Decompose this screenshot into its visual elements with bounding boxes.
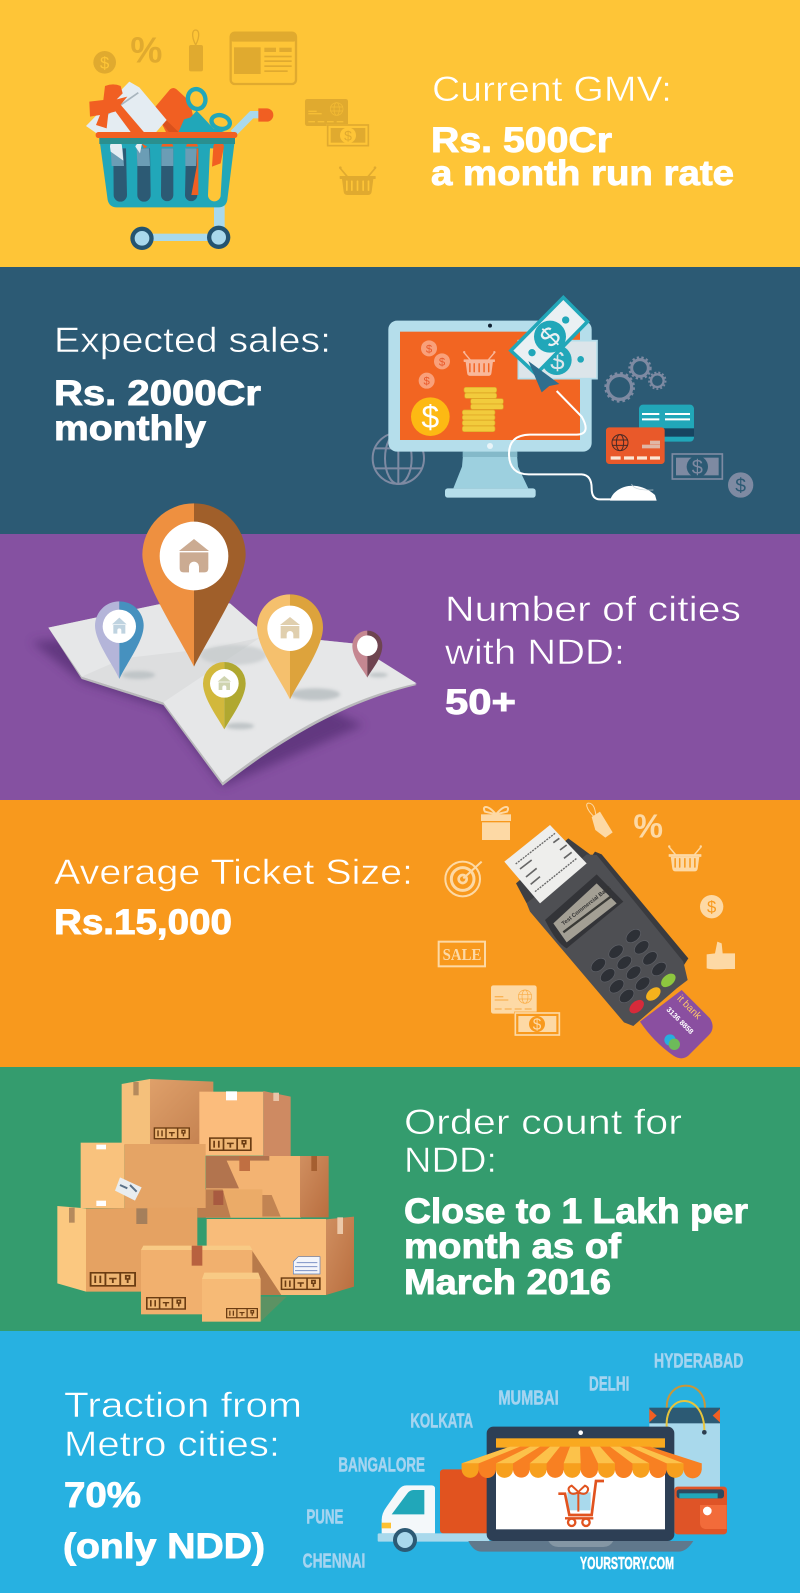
shopping bag bbox=[649, 1386, 720, 1490]
text: metro traction bbox=[63, 1386, 302, 1566]
text: expected sales bbox=[54, 321, 331, 448]
text: expected sales: monthly bbox=[54, 409, 207, 448]
pin: olive bbox=[203, 662, 246, 729]
truck bbox=[378, 1469, 490, 1552]
text: current GMV bbox=[431, 70, 734, 193]
text: average ticket size: Rs.15,000 bbox=[54, 903, 232, 942]
box: back top right bbox=[199, 1091, 291, 1156]
panel: current GMV bbox=[0, 0, 800, 267]
awning bbox=[462, 1447, 702, 1478]
coins on screen: $ bbox=[421, 399, 439, 435]
text: order count bbox=[404, 1103, 748, 1302]
cart frame and wheels bbox=[130, 108, 273, 250]
coins on screen: $ bbox=[426, 343, 433, 355]
box: front middle bbox=[141, 1246, 252, 1314]
keypad bbox=[589, 927, 669, 1005]
illustration: stacked boxes bbox=[57, 1079, 354, 1322]
box: middle left bbox=[81, 1143, 206, 1208]
text: metro traction: 70% bbox=[64, 1476, 141, 1515]
box: bottom right bbox=[207, 1217, 354, 1295]
card: it bank bbox=[675, 993, 703, 1022]
illustration: map with pins bbox=[32, 503, 417, 787]
monitor bbox=[388, 321, 592, 498]
illustration: card terminal bbox=[439, 803, 735, 1058]
city labels: HYDERABAD bbox=[654, 1350, 743, 1373]
text: order count: month as of bbox=[404, 1227, 621, 1266]
text: metro traction: (only NDD) bbox=[63, 1527, 265, 1566]
text: current GMV: Current GMV: bbox=[432, 70, 672, 109]
text: expected sales: Expected sales: bbox=[54, 321, 331, 360]
background icons: SALE bbox=[443, 945, 481, 964]
text: order count: Close to 1 Lakh per bbox=[404, 1192, 748, 1231]
text: current GMV: a month run rate bbox=[431, 154, 734, 193]
panel: metro traction bbox=[0, 1331, 800, 1593]
background icons: % bbox=[633, 809, 663, 846]
text: metro traction: Metro cities: bbox=[64, 1425, 280, 1464]
pin shadows bbox=[122, 645, 388, 729]
panel: expected sales bbox=[0, 267, 800, 535]
text: metro traction: Traction from bbox=[64, 1386, 302, 1425]
text: order count: March 2016 bbox=[404, 1263, 611, 1302]
pin: blue bbox=[95, 601, 144, 679]
illustration: shopping cart: $ bbox=[100, 53, 109, 72]
icon: dollar coin bbox=[728, 472, 753, 498]
terminal: Test Commercial Bank bbox=[561, 885, 613, 927]
text: current GMV: Rs. 500Cr bbox=[431, 121, 612, 160]
icon: gears bbox=[605, 357, 666, 402]
box: front small bbox=[202, 1273, 287, 1322]
text: cities with NDD: with NDD: bbox=[444, 633, 625, 672]
city labels: BANGALORE bbox=[338, 1454, 425, 1477]
text: order count: Order count for bbox=[404, 1103, 682, 1142]
panel: order count bbox=[0, 1067, 800, 1331]
gifts bbox=[86, 82, 231, 133]
text: cities with NDD: 50+ bbox=[445, 683, 516, 722]
illustration: online sales monitor bbox=[373, 295, 753, 501]
city labels bbox=[303, 1350, 743, 1572]
city labels: DELHI bbox=[589, 1373, 629, 1396]
box: back right bbox=[206, 1156, 329, 1218]
icon: credit cards bbox=[606, 405, 694, 464]
icon: banknote bbox=[672, 454, 722, 479]
city labels: MUMBAI bbox=[498, 1386, 559, 1409]
pin: gold bbox=[257, 594, 323, 699]
terminal buttons bbox=[627, 971, 678, 1016]
mouse and cable bbox=[509, 391, 657, 501]
terminal bbox=[504, 825, 688, 1026]
text: average ticket size: Average Ticket Size: bbox=[54, 853, 413, 892]
banknotes and cursor: $ bbox=[550, 345, 565, 375]
icon: globe bbox=[373, 433, 424, 484]
map bbox=[32, 603, 417, 787]
wallet bbox=[674, 1487, 727, 1534]
text: order count: NDD: bbox=[404, 1141, 497, 1180]
illustration: shopping cart: % bbox=[130, 30, 162, 71]
panel: cities with NDD bbox=[0, 503, 800, 800]
illustration: shopping cart bbox=[86, 30, 376, 250]
credit: yourstory.com: YOURSTORY.COM bbox=[580, 1553, 674, 1573]
background icons: $ bbox=[533, 1016, 542, 1033]
laptop bbox=[468, 1427, 693, 1552]
banknotes and cursor: $ bbox=[534, 320, 567, 353]
icon: banknote: $ bbox=[692, 457, 703, 479]
icon: dollar coin: $ bbox=[735, 476, 746, 497]
pin: large orange bbox=[142, 503, 246, 667]
city labels: CHENNAI bbox=[303, 1549, 365, 1572]
icon: cart with gift bbox=[558, 1481, 604, 1526]
city labels: PUNE bbox=[306, 1506, 343, 1529]
background icons: $ bbox=[707, 898, 716, 917]
illustration: shopping cart: $ bbox=[344, 127, 352, 143]
pin: mauve bbox=[352, 631, 382, 678]
box: bottom left bbox=[57, 1206, 197, 1292]
card bbox=[640, 990, 713, 1058]
coins on screen: $ bbox=[439, 356, 446, 368]
text: average ticket size bbox=[54, 853, 413, 942]
basket bbox=[96, 132, 237, 207]
city labels: KOLKATA bbox=[410, 1410, 473, 1433]
card: 3136 8858 bbox=[665, 1005, 695, 1036]
banknotes and cursor bbox=[508, 295, 597, 392]
coins on screen bbox=[411, 340, 503, 436]
illustration: online store bbox=[303, 1350, 743, 1573]
box: back left bbox=[122, 1079, 213, 1145]
text: cities with NDD bbox=[444, 590, 741, 722]
text: cities with NDD: Number of cities bbox=[445, 590, 741, 629]
panel: average ticket size bbox=[0, 800, 800, 1067]
box: middle small bbox=[197, 1189, 262, 1218]
coins on screen: $ bbox=[424, 376, 431, 388]
background icons bbox=[439, 803, 735, 1036]
text: expected sales: Rs. 2000Cr bbox=[54, 374, 261, 413]
